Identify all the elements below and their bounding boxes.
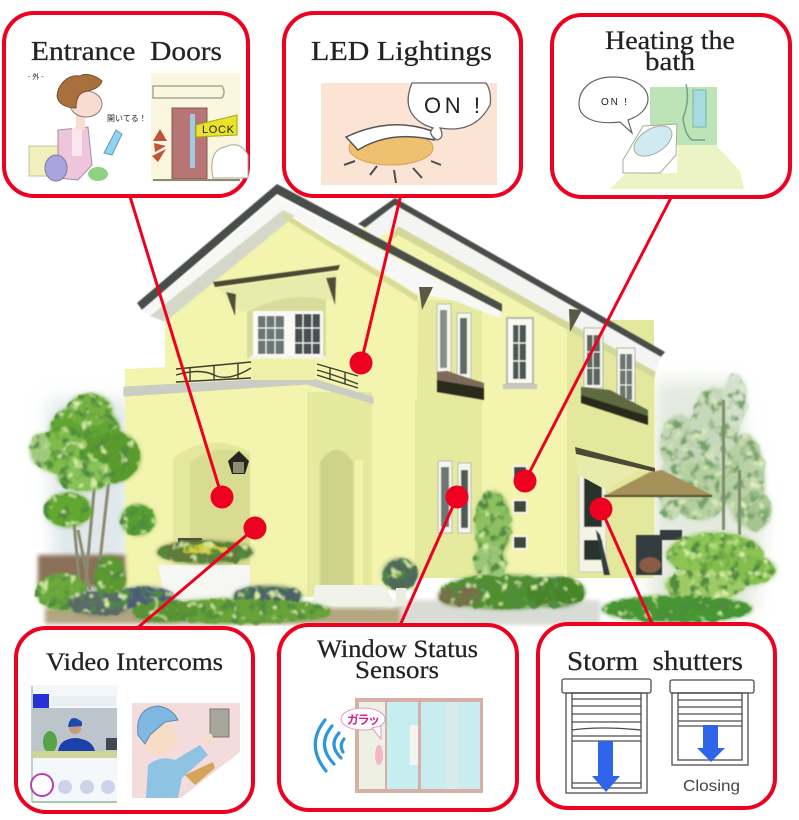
panel frame: [538, 624, 775, 808]
roof brackets: [419, 287, 582, 332]
icon: shutter half closed: [562, 679, 651, 793]
upper windows right: [584, 328, 635, 403]
icon: woman with smartphone: [28, 72, 147, 181]
right background trees: [658, 374, 771, 530]
icon: sensor speech bubble: [341, 708, 385, 739]
panel frame: [552, 15, 790, 197]
front lower wall: [125, 392, 307, 597]
marker: heating the bath: [514, 470, 536, 492]
icon: locked door: LOCK: [202, 124, 235, 136]
patio flower pot: [639, 557, 661, 573]
right wall of the rear house: [330, 205, 655, 575]
heading line 1: Heating the: [605, 26, 735, 55]
steps: [312, 585, 395, 618]
wooden fence: [38, 555, 125, 587]
connector line: entrance doors: [128, 190, 222, 497]
left garden shrubs: [37, 541, 330, 623]
patio door: [579, 472, 606, 572]
icon: sensor speech bubble: ガラッ: [347, 712, 380, 727]
heading line 1: Window Status: [317, 636, 478, 663]
icon: lamp and speech bubble: [321, 83, 497, 185]
caption: Closing: [683, 778, 740, 795]
shaded wing right: [567, 320, 654, 578]
right hedges: [602, 533, 776, 622]
patio furniture: [596, 530, 682, 575]
heading: Storm shutters: [567, 646, 743, 676]
patio awning: [575, 447, 655, 472]
panel: video intercoms: [16, 628, 253, 812]
icon: sliding window: [355, 698, 483, 793]
heading line 2: bath: [645, 47, 695, 76]
balcony parapet: [252, 358, 315, 380]
panel: window status sensors: [279, 625, 517, 810]
panel frame: [16, 628, 253, 812]
panel: storm shutters: [538, 624, 775, 808]
balcony band: [125, 378, 372, 402]
patio umbrella: [604, 470, 712, 497]
panel frame: [284, 13, 521, 196]
marker: entrance doors: [210, 486, 234, 508]
connector line: window status sensors: [398, 497, 457, 630]
house illustration with garden: [30, 184, 776, 625]
small stair windows: [513, 466, 527, 549]
flower boxes: [437, 371, 648, 425]
panel frame: [279, 625, 517, 810]
recessed wall section: [415, 300, 482, 578]
connector line: LED lightings: [361, 190, 402, 363]
icon: bathroom: [579, 77, 744, 189]
awning underside: [576, 454, 640, 490]
panel: entrance doors: [4, 13, 248, 196]
marker: video intercoms: [244, 516, 266, 540]
heading: LED Lightings: [311, 36, 492, 66]
window canopy: [213, 265, 340, 316]
ground left: [45, 608, 400, 624]
icon: locked door: [151, 73, 248, 182]
right tree trunks: [722, 400, 741, 535]
front roof: [137, 184, 502, 322]
balcony railings: [176, 362, 358, 388]
side lower wall: [307, 392, 372, 597]
heading: Entrance Doors: [31, 36, 222, 66]
wall between wings: [372, 395, 415, 590]
icon: intercom monitor: [31, 685, 117, 803]
wall lantern: [228, 451, 249, 474]
pillar by side door: [355, 460, 363, 590]
left tree foliage: [30, 394, 155, 535]
panel: heating the bath: [552, 15, 790, 197]
centre planter pot: [396, 588, 406, 606]
rear roof: [358, 198, 665, 378]
planter: [158, 538, 250, 600]
left tree trunks: [72, 470, 110, 590]
icon: lamp and speech bubble: ON !: [424, 93, 480, 118]
heading: Video Intercoms: [46, 649, 223, 676]
panel: LED lightings: [284, 13, 521, 196]
icon: woman with smartphone: 開いてる！: [107, 114, 147, 123]
entrance arch: [173, 442, 250, 590]
marker: LED lightings: [350, 352, 372, 374]
marker: window status sensors: [446, 486, 468, 508]
upper windows center: [437, 304, 537, 389]
icon: wireless waves: [315, 720, 344, 771]
centre garden plants: [383, 491, 585, 609]
panel frame: [4, 13, 248, 196]
hazy backdrop behind right trees: [650, 380, 765, 610]
icon: delivery man at door: [132, 703, 240, 798]
connector line: video intercoms: [135, 528, 255, 630]
hazy backdrop behind left tree: [48, 400, 130, 600]
icon: shutter closing: [670, 680, 754, 765]
connector line: storm shutters: [601, 509, 654, 628]
connector line: heating the bath: [525, 190, 675, 481]
ground paving: [395, 600, 600, 625]
side door arch: [320, 450, 353, 590]
lower windows: [438, 461, 471, 533]
marker: storm shutters: [590, 498, 612, 520]
icon: bathroom: ON !: [601, 97, 627, 108]
balcony window: [247, 297, 326, 359]
icon: woman with smartphone: - 外 -: [28, 72, 44, 81]
front gable wall: [125, 212, 418, 400]
heading line 2: Sensors: [355, 657, 439, 684]
